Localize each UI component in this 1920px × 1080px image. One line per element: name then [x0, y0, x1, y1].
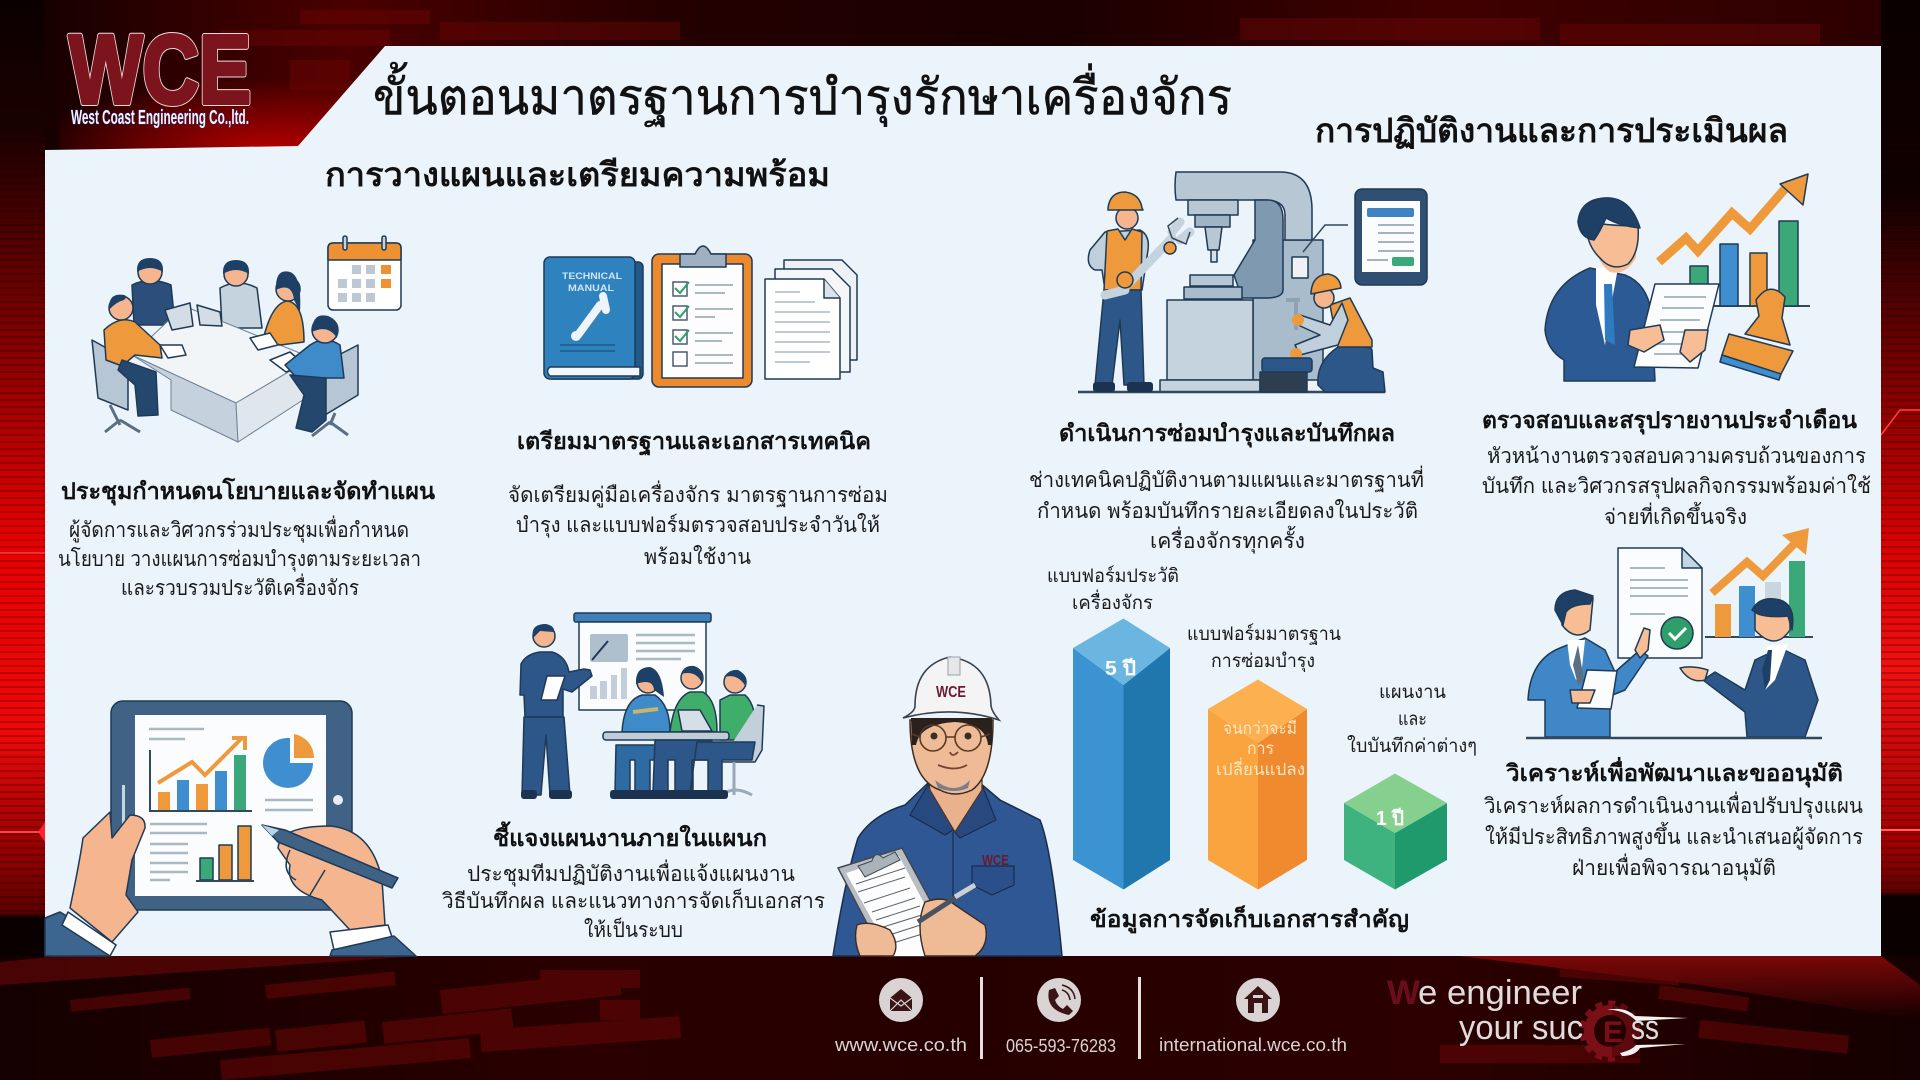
icon: manager reviewing report	[1545, 174, 1810, 381]
label: maintenance standard form: การซ่อมบำรุง	[1211, 651, 1315, 673]
label: work plans and records: และ	[1398, 709, 1427, 730]
footer contact: website: www.wce.co.th	[834, 1035, 967, 1055]
bar: until changed: จนกว่าจะมี	[1223, 719, 1297, 738]
heading: planning: การวางแผนและเตรียมความพร้อม	[325, 156, 830, 193]
icon: phone	[1037, 978, 1081, 1022]
text: analysis and approval description	[1484, 791, 1863, 881]
icon: technical manual book: MANUAL	[568, 283, 615, 293]
text: analysis and approval description: วิเคราะห์ผลการดำเนินงานเพื่อปรับปรุงแผน	[1484, 791, 1863, 819]
footer contact: phone	[1006, 978, 1116, 1056]
label: equipment history form: แบบฟอร์มประวัติ	[1047, 565, 1179, 587]
subheading: monthly review: ตรวจสอบและสรุปรายงานประจำเดือน	[1482, 407, 1857, 435]
footer contact: phone: 065-593-76283	[1006, 1036, 1116, 1056]
text: policy meeting description: ผู้จัดการและวิศวกรร่วมประชุมเพื่อกำหนด	[69, 515, 409, 543]
slogan: we engineer your success: e engineer	[1418, 974, 1582, 1012]
icon: inspection tablet	[1355, 189, 1427, 285]
chart title: ข้อมูลการจัดเก็บเอกสารสำคัญ	[1090, 904, 1409, 934]
text: monthly review description: จ่ายที่เกิดขึ้นจริง	[1604, 502, 1747, 529]
title: ขั้นตอนมาตรฐานการบำรุงรักษาเครื่องจักร	[373, 62, 1232, 127]
subheading: department briefing: ชี้แจงแผนงานภายในแผนก	[493, 821, 767, 851]
bar: until changed: เปลี่ยนแปลง	[1216, 757, 1305, 779]
text: department briefing description: ให้เป็นระบบ	[584, 916, 683, 942]
text: department briefing description	[442, 859, 825, 942]
panel: technical documents	[508, 246, 888, 569]
character: engineer with clipboard	[833, 657, 1062, 956]
text: monthly review description: บันทึก และวิศวกรสรุปผลกิจกรรมพร้อมค่าใช้	[1482, 474, 1871, 499]
chart: document retention periods	[1047, 565, 1477, 934]
subheading: maintenance execution: ดำเนินการซ่อมบำรุงและบันทึกผล	[1059, 420, 1395, 448]
bar: until changed	[1208, 680, 1307, 890]
icon: gear: E	[1603, 1016, 1623, 1049]
icon: milling machine with technicians	[1078, 172, 1385, 392]
subheading: analysis and approval: วิเคราะห์เพื่อพัฒนาและขออนุมัติ	[1505, 756, 1843, 788]
footer contact: international site: international.wce.co.th	[1159, 1035, 1347, 1055]
text: maintenance execution description: เครื่องจักรทุกครั้ง	[1150, 526, 1305, 554]
character: engineer with clipboard: WCE	[936, 684, 966, 701]
text: analysis and approval description: ให้มีประสิทธิภาพสูงขึ้น และนำเสนอผู้จัดการ	[1485, 822, 1863, 850]
icon: paper stack	[765, 260, 857, 379]
icon: home	[1236, 978, 1280, 1022]
logo: West Coast Engineering: West Coast Engineering Co.,ltd.	[71, 107, 249, 129]
divider	[980, 977, 983, 1059]
icon: technical manual book	[544, 257, 643, 379]
bar: 5 years: 5 ปี	[1105, 657, 1136, 680]
icon: two managers reviewing approved document	[1526, 528, 1822, 738]
text: policy meeting description: และรวบรวมประวัติเครื่องจักร	[121, 573, 359, 600]
character: engineer with clipboard: WCE	[982, 852, 1009, 869]
text: policy meeting description	[58, 515, 421, 600]
icon: presenter with audience	[520, 613, 764, 799]
footer band	[0, 956, 1920, 1080]
slogan: we engineer your success	[1387, 974, 1688, 1059]
bar: until changed: การ	[1247, 739, 1274, 758]
text: department briefing description: ประชุมทีมปฏิบัติงานเพื่อแจ้งแผนงาน	[467, 859, 795, 887]
text: technical documents description	[508, 480, 888, 569]
footer contact: international site	[1159, 978, 1347, 1055]
label: equipment history form	[1047, 565, 1179, 614]
panel: department briefing	[442, 613, 825, 942]
heading: execution and evaluation: การปฏิบัติงานและการประเมินผล	[1315, 112, 1788, 149]
bar: 1 year: 1 ปี	[1376, 807, 1404, 830]
icon: technical manual book: TECHNICAL	[562, 271, 623, 281]
logo: West Coast Engineering: WCE	[69, 15, 251, 124]
icon: calendar	[328, 236, 401, 310]
label: maintenance standard form	[1187, 623, 1341, 673]
bar: 1 year	[1344, 774, 1447, 890]
icon: envelope	[879, 978, 923, 1022]
icon: meeting table with people	[92, 258, 358, 442]
icon: tablet with charts and hands	[45, 701, 416, 956]
slogan: we engineer your success: W	[1387, 974, 1421, 1012]
text: maintenance execution description: ช่างเทคนิคปฏิบัติงานตามแผนและมาตรฐานที่	[1029, 465, 1424, 492]
text: monthly review description	[1482, 445, 1871, 529]
label: work plans and records	[1347, 682, 1477, 757]
text: policy meeting description: นโยบาย วางแผนการซ่อมบำรุงตามระยะเวลา	[58, 547, 421, 572]
text: technical documents description: พร้อมใช้งาน	[644, 545, 751, 569]
logo: West Coast Engineering: WCE	[69, 15, 251, 124]
panel: analysis and approval	[1484, 528, 1863, 881]
label: work plans and records: ใบบันทึกค่าต่างๆ	[1347, 735, 1477, 757]
icon: gear	[1582, 1003, 1688, 1059]
panel: policy meeting	[58, 236, 435, 600]
text: department briefing description: วิธีบันทึกผล และแนวทางการจัดเก็บเอกสาร	[442, 887, 825, 913]
slogan: we engineer your success: ss	[1631, 1009, 1659, 1047]
footer contact: website	[834, 978, 967, 1055]
panel: maintenance execution	[1029, 172, 1427, 554]
text: analysis and approval description: ฝ่ายเพื่อพิจารณาอนุมัติ	[1572, 853, 1776, 881]
divider	[1138, 977, 1141, 1059]
subheading: technical documents: เตรียมมาตรฐานและเอกสารเทคนิค	[517, 428, 871, 456]
subheading: policy meeting: ประชุมกำหนดนโยบายและจัดทำแผน	[61, 477, 435, 506]
label: maintenance standard form: แบบฟอร์มมาตรฐาน	[1187, 623, 1341, 645]
text: monthly review description: หัวหน้างานตรวจสอบความครบถ้วนของการ	[1487, 445, 1866, 468]
label: equipment history form: เครื่องจักร	[1072, 589, 1153, 614]
slogan: we engineer your success: your suc	[1459, 1009, 1583, 1047]
text: technical documents description: บำรุง และแบบฟอร์มตรวจสอบประจำวันให้	[516, 513, 880, 538]
panel: monthly review	[1482, 174, 1871, 529]
icon: checklist clipboard	[652, 246, 752, 387]
text: maintenance execution description: กำหนด พร้อมบันทึกรายละเอียดลงในประวัติ	[1037, 499, 1418, 523]
bar: 5 years	[1073, 618, 1170, 890]
label: work plans and records: แผนงาน	[1379, 682, 1446, 703]
text: maintenance execution description	[1029, 465, 1424, 554]
text: technical documents description: จัดเตรียมคู่มือเครื่องจักร มาตรฐานการซ่อม	[508, 480, 888, 508]
